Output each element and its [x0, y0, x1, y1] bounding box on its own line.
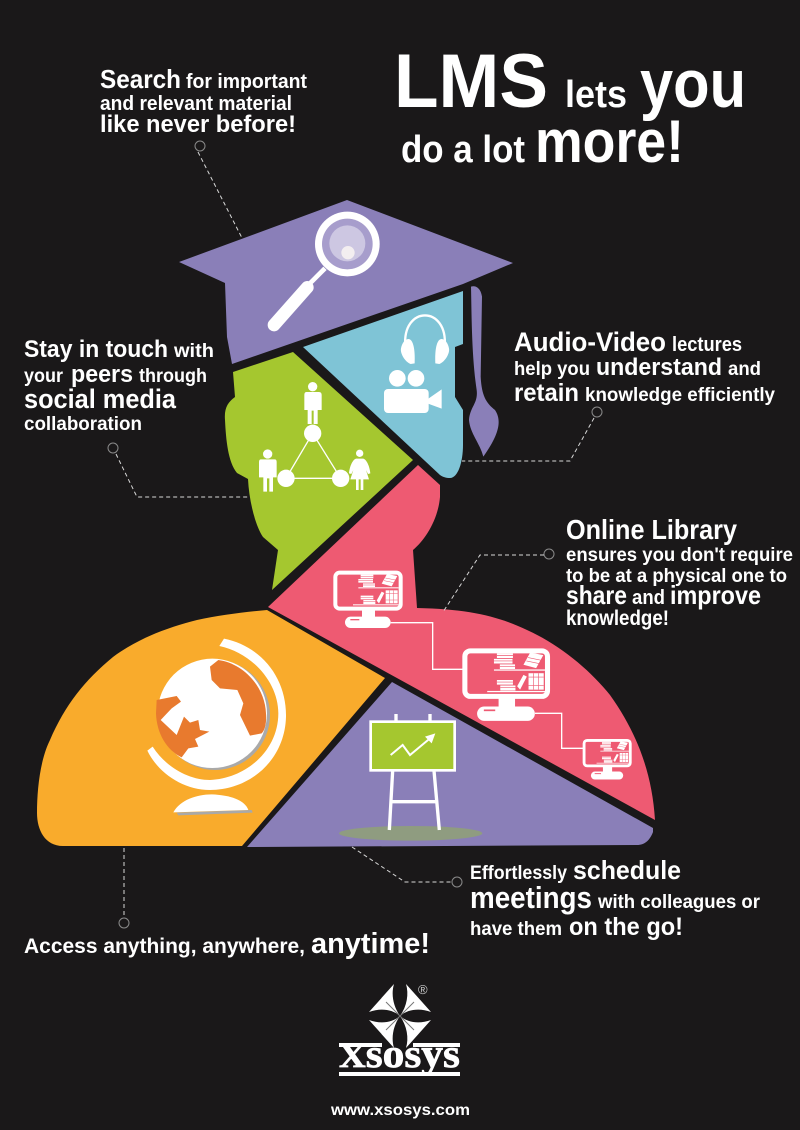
icon: globe [147, 639, 286, 815]
icon: easel chart [339, 714, 482, 841]
title [394, 39, 746, 175]
text: social media: through [139, 366, 207, 387]
text: social media: Stay in touch [24, 336, 168, 363]
cap shape [179, 200, 513, 364]
connector: social media [108, 443, 250, 497]
text: search: for important [186, 71, 307, 93]
text: audio-video: understand [596, 354, 722, 381]
text: audio-video: help you [514, 359, 590, 380]
icon: tassel [469, 286, 499, 457]
text: meetings: meetings [470, 880, 592, 915]
connector: access [119, 848, 129, 928]
icon: headphones and camera [384, 315, 449, 413]
text: social media [24, 336, 214, 435]
text: audio-video [514, 327, 775, 407]
icon: logo mark: ® [418, 982, 428, 997]
website url: www.xsosys.com [330, 1102, 470, 1119]
text: access [24, 928, 430, 960]
body shape [37, 610, 385, 846]
body shape [268, 465, 655, 820]
panel: search cap [179, 200, 513, 364]
text: audio-video: Audio-Video [514, 327, 666, 357]
text: online library: Online Library [566, 514, 737, 545]
logo bars [339, 1043, 460, 1076]
text: access: anytime! [311, 928, 430, 960]
panel: online library [268, 465, 655, 820]
panel: social media [225, 352, 413, 590]
icon: magnifier [274, 212, 380, 325]
text: online library [566, 514, 793, 630]
icon: connected library monitors [335, 573, 630, 780]
connector: audio-video [462, 407, 602, 461]
connector: meetings [352, 847, 462, 887]
title: LMS [394, 39, 548, 124]
face shape [303, 291, 463, 478]
text: social media: collaboration [24, 414, 142, 435]
panel: meetings [247, 682, 653, 847]
connector: online library [443, 549, 554, 612]
text: online library: to be at a physical one to [566, 566, 787, 587]
panel: anywhere access [37, 610, 385, 846]
text: meetings: on the go! [569, 913, 683, 941]
body shape [247, 682, 653, 847]
face shape [225, 352, 413, 590]
icon: people network [259, 382, 370, 492]
text: online library: ensures you don't require [566, 545, 793, 566]
title: you [640, 46, 746, 122]
title: lets [565, 74, 627, 116]
text: audio-video: retain [514, 379, 579, 407]
text: search: like never before! [100, 111, 296, 138]
text: online library: and [632, 587, 665, 609]
text: access: Access anything, anywhere, [24, 935, 305, 958]
panel: audio-video [303, 291, 463, 478]
text: meetings: Effortlessly [470, 863, 567, 884]
text: online library: share [566, 580, 627, 610]
text: social media: peers [71, 361, 133, 388]
text: audio-video: lectures [672, 334, 742, 356]
text: meetings [470, 855, 761, 941]
text: meetings: have them [470, 919, 562, 940]
text: social media: with [173, 341, 214, 362]
text: online library: knowledge! [566, 607, 669, 630]
logo: Xsosys [339, 982, 460, 1076]
text: meetings: schedule [573, 855, 681, 885]
text: search: and relevant material [100, 93, 292, 115]
text: search [100, 64, 307, 138]
text: search: Search [100, 64, 181, 94]
text: meetings: with colleagues or [597, 892, 761, 913]
text: audio-video: knowledge efficiently [585, 385, 775, 406]
logo: Xsosys: Xsosys [339, 1031, 460, 1076]
title: do a lot [401, 129, 525, 171]
text: social media: your [24, 366, 64, 387]
text: online library: improve [670, 580, 761, 610]
text: audio-video: and [728, 359, 761, 380]
connector: search [195, 141, 242, 238]
text: social media: social media [24, 384, 177, 414]
title: more! [535, 108, 684, 175]
